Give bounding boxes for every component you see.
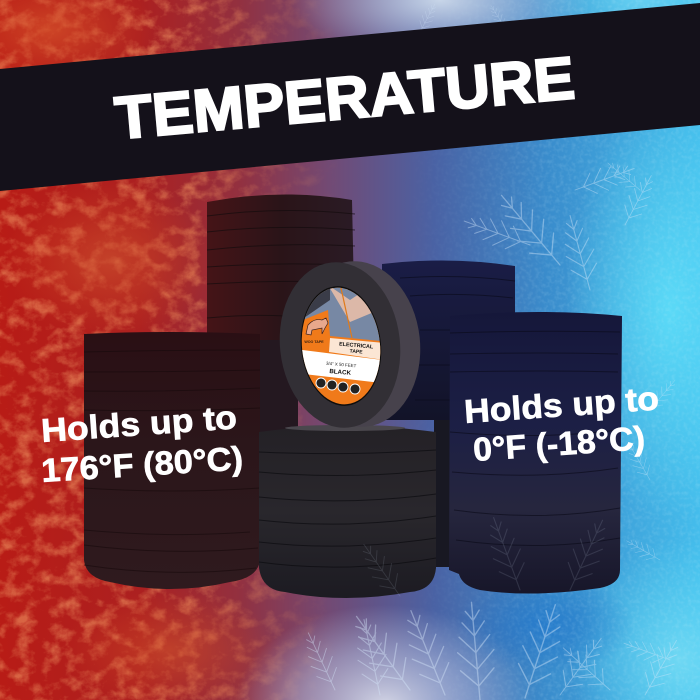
frost overlay on lower tape <box>354 513 616 603</box>
label: white band <box>302 350 380 382</box>
center roll of electrical tape: ELECTRICAL <box>339 342 374 351</box>
center roll of electrical tape <box>280 261 420 428</box>
cold caption: Holds up to <box>463 379 660 430</box>
roll face <box>272 256 408 434</box>
frost feathers <box>298 1 687 700</box>
center roll of electrical tape: TAPE <box>349 348 363 356</box>
cold caption: 0°F (-18°C) <box>472 419 646 468</box>
tape stack: back right <box>382 260 515 420</box>
center roll of electrical tape: 3/4" X 50 FEET <box>326 361 357 368</box>
tape stack: center front <box>259 425 436 598</box>
hot caption <box>40 398 244 489</box>
center roll of electrical tape: WOO TAPE <box>304 340 324 344</box>
roll side <box>288 255 428 433</box>
cold caption <box>463 379 660 468</box>
center roll of electrical tape: BLACK <box>329 368 352 377</box>
tape stack: back left <box>207 194 355 340</box>
label: rhino logo <box>306 318 328 335</box>
title banner <box>0 3 700 191</box>
hot caption: 176°F (80°C) <box>40 439 244 489</box>
label: title panel <box>329 338 384 360</box>
dark gaps behind stacks <box>258 325 462 567</box>
label: photo <box>304 288 380 341</box>
label: icons <box>316 378 326 388</box>
tape stack: left <box>84 332 260 589</box>
fire texture <box>0 0 340 700</box>
tape stack: right <box>449 312 622 594</box>
title text: TEMPERATURE <box>112 44 577 152</box>
hot caption: Holds up to <box>40 398 238 449</box>
label disc <box>295 282 387 410</box>
